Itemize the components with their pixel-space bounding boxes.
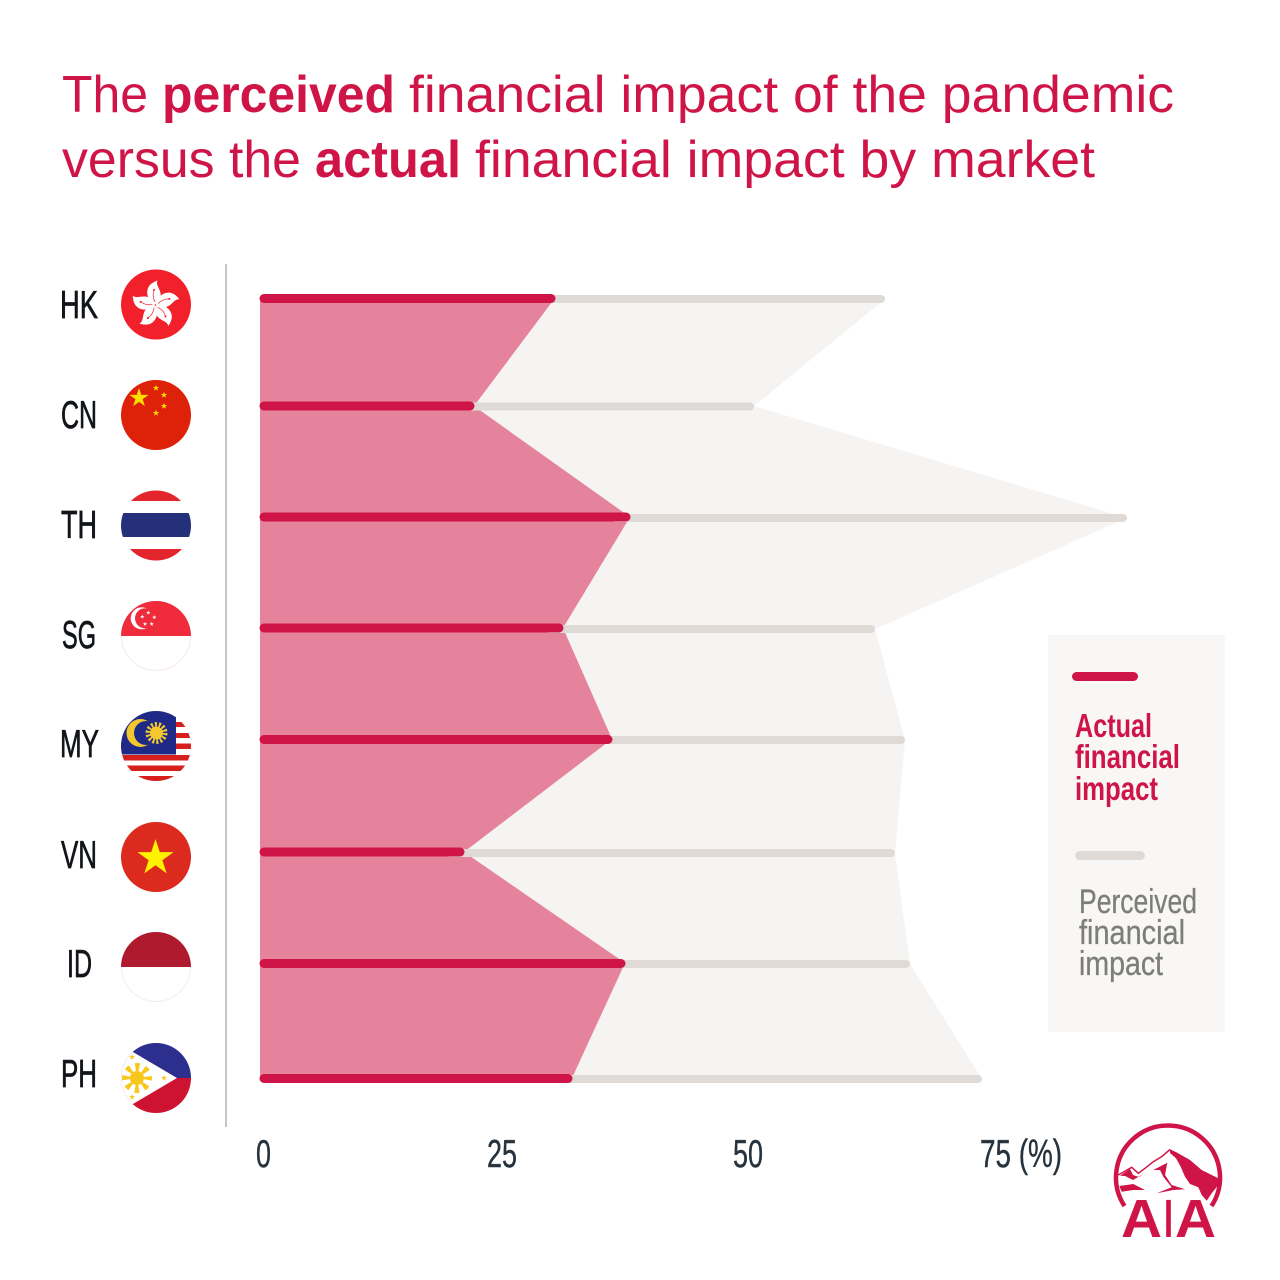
market labels: PH	[61, 1053, 97, 1096]
market labels: VN	[61, 834, 97, 877]
market labels: HK	[60, 284, 98, 327]
title: financial impact of the pandemic	[409, 66, 1174, 124]
flag: Malaysia	[121, 711, 191, 781]
flag: Hong Kong	[121, 269, 191, 340]
legend swatch: actual	[1072, 672, 1138, 681]
legend label: actual: Actual	[1075, 707, 1152, 744]
title: The	[62, 66, 148, 124]
x axis labels: 75 (%)	[980, 1133, 1062, 1176]
flag: Philippines	[121, 1043, 191, 1113]
legend label: perceived: impact	[1079, 945, 1163, 983]
flag: Singapore	[121, 601, 191, 636]
flag: Vietnam	[121, 822, 191, 892]
legend label: actual	[1075, 707, 1180, 807]
flag: Indonesia	[121, 932, 191, 967]
area: perceived financial impact	[260, 299, 1127, 1079]
area: actual financial impact	[260, 298, 630, 1078]
x axis labels	[256, 1133, 1062, 1176]
market labels: ID	[67, 943, 92, 986]
market labels: SG	[62, 614, 96, 657]
legend label: perceived: Perceived	[1079, 883, 1197, 921]
flag: Singapore outline	[122, 636, 190, 670]
x axis labels: 0	[256, 1133, 271, 1176]
legend label: actual: impact	[1075, 770, 1158, 807]
market labels: MY	[60, 723, 99, 766]
bars: actual	[264, 298, 626, 1078]
chart: perceived vs actual	[260, 298, 1127, 1079]
title: versus the	[62, 131, 301, 189]
title: perceived	[162, 66, 395, 124]
legend label: perceived	[1079, 883, 1197, 983]
market labels: CN	[61, 394, 97, 437]
legend swatch: perceived	[1075, 851, 1145, 860]
flags	[121, 269, 191, 1113]
vertical axis line	[225, 264, 227, 1127]
x axis labels: 50	[733, 1133, 763, 1176]
title	[62, 66, 1174, 189]
legend panel	[1048, 635, 1225, 1032]
title: actual	[315, 131, 461, 189]
legend label: perceived: financial	[1079, 914, 1185, 952]
legend	[1048, 635, 1225, 1032]
logo: AIA: A	[1121, 1189, 1162, 1249]
flag: Indonesia outline	[122, 967, 190, 1001]
flag: China	[121, 380, 191, 450]
logo: AIA: A	[1175, 1189, 1216, 1249]
bars: perceived	[450, 299, 1123, 1079]
title: financial impact by market	[475, 131, 1096, 189]
logo: AIA: I	[1164, 1189, 1173, 1249]
market labels: TH	[61, 504, 97, 547]
logo: AIA	[1116, 1126, 1220, 1249]
flag: Thailand	[121, 490, 191, 561]
legend label: actual: financial	[1075, 738, 1180, 775]
market labels	[60, 284, 99, 1096]
x axis labels: 25	[487, 1133, 517, 1176]
